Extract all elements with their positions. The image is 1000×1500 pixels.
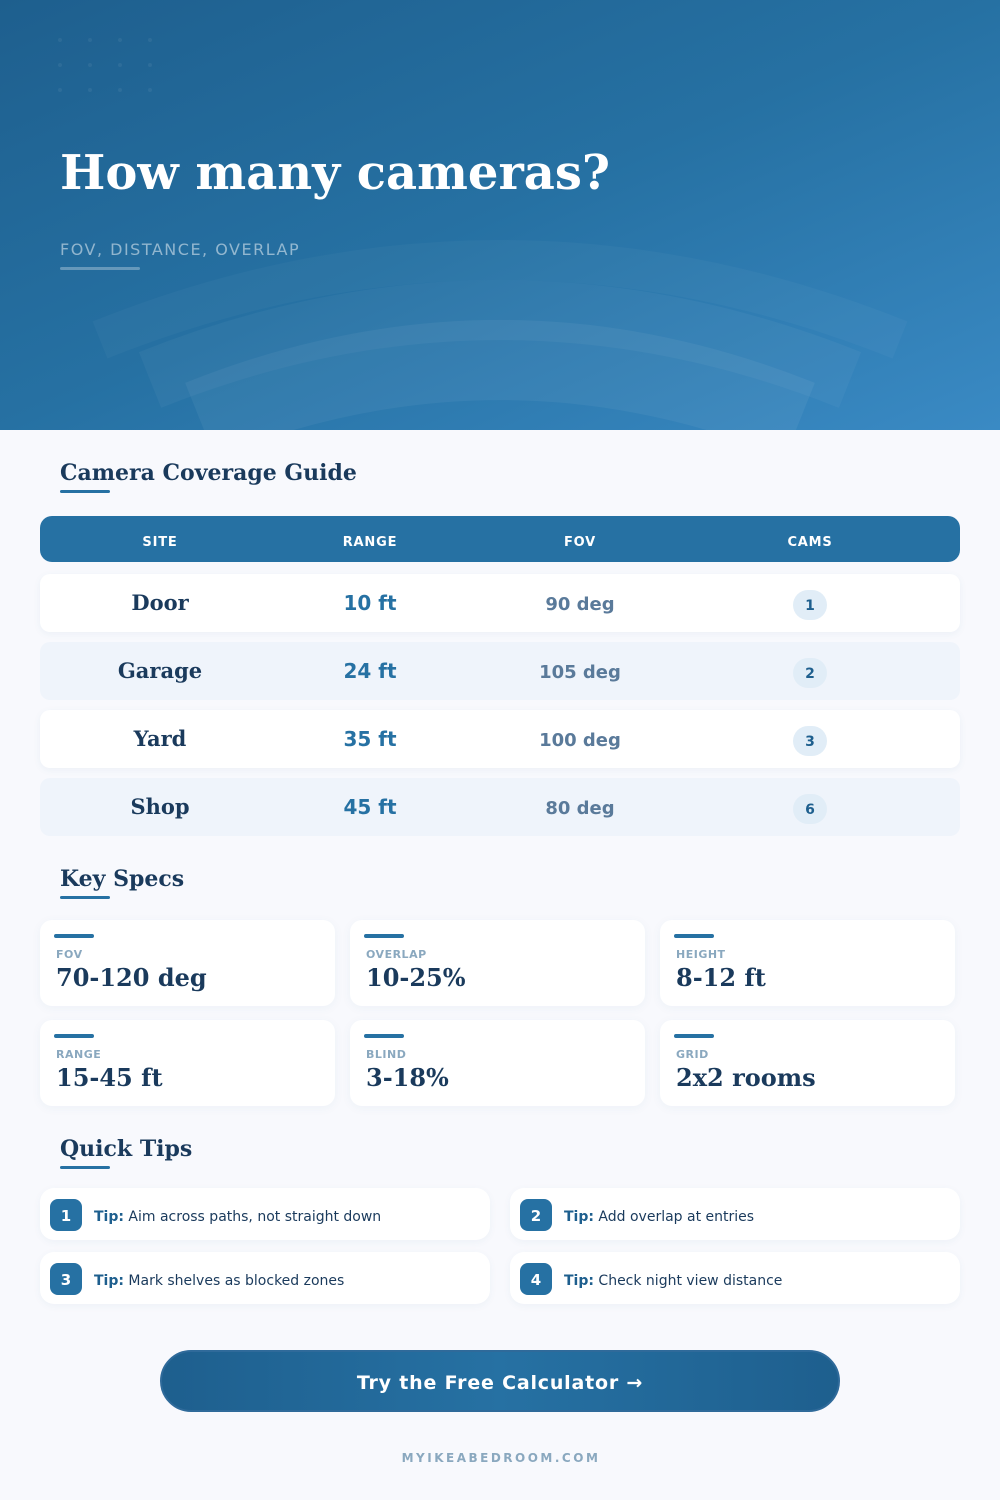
tip 3: Tip: Mark shelves as blocked zones bbox=[94, 1273, 344, 1289]
spec card: Overlap bbox=[350, 920, 645, 1006]
tip 4 bbox=[510, 1252, 960, 1304]
table row: Shop: 80 deg bbox=[545, 798, 615, 819]
footer: MYIKEABEDROOM.COM bbox=[402, 1451, 600, 1465]
spec card: Grid: GRID bbox=[676, 1048, 709, 1061]
spec card: Grid: 2x2 rooms bbox=[676, 1063, 816, 1092]
table row: Yard: 100 deg bbox=[539, 730, 621, 751]
table row: Garage: 24 ft bbox=[343, 659, 397, 683]
table row: Garage: 2 bbox=[805, 666, 815, 682]
spec card: Blind bbox=[350, 1020, 645, 1106]
spec card: Grid bbox=[660, 1020, 955, 1106]
spec card: Blind: BLIND bbox=[366, 1048, 406, 1061]
tip 4: 4 bbox=[531, 1271, 541, 1289]
tip 3 bbox=[40, 1252, 490, 1304]
tip 2 bbox=[510, 1188, 960, 1240]
tip 1: Tip: Aim across paths, not straight down bbox=[94, 1209, 381, 1225]
subtitle underline bbox=[60, 267, 140, 270]
table row: Yard bbox=[40, 710, 960, 768]
spec card: Blind: 3-18% bbox=[366, 1063, 449, 1092]
table row: Door: Door bbox=[131, 590, 189, 615]
table header: SITE bbox=[142, 535, 178, 550]
spec card: Height: HEIGHT bbox=[676, 948, 726, 961]
icon: dot pattern bbox=[58, 38, 152, 92]
title: How many cameras? bbox=[60, 145, 610, 201]
table row: Door: 10 ft bbox=[343, 591, 397, 615]
table row: Yard: Yard bbox=[134, 726, 186, 751]
table row: Door: 1 bbox=[805, 598, 815, 614]
panel: hero header bbox=[0, 0, 1000, 430]
tip 1: 1 bbox=[61, 1207, 71, 1225]
spec card: Height bbox=[660, 920, 955, 1006]
table row: Door: 90 deg bbox=[545, 594, 615, 615]
table row: Yard: 35 ft bbox=[343, 727, 397, 751]
table row: Yard: 3 bbox=[805, 734, 815, 750]
table header bbox=[40, 516, 960, 562]
spec card: Range: RANGE bbox=[56, 1048, 101, 1061]
call to action button bbox=[160, 1350, 840, 1412]
tip 3: 3 bbox=[61, 1271, 71, 1289]
table row: Shop bbox=[40, 778, 960, 836]
table row: Shop: 6 bbox=[805, 802, 815, 818]
spec card: Range: 15-45 ft bbox=[56, 1063, 163, 1092]
table row: Garage: 105 deg bbox=[539, 662, 621, 683]
table header: RANGE bbox=[343, 535, 397, 550]
spec card: FOV: FOV bbox=[56, 948, 83, 961]
heading: Camera Coverage Guide: Camera Coverage Guide bbox=[60, 460, 357, 486]
spec card: Range bbox=[40, 1020, 335, 1106]
spec card: Overlap: 10-25% bbox=[366, 963, 466, 992]
tip 1 bbox=[40, 1188, 490, 1240]
spec card: FOV bbox=[40, 920, 335, 1006]
tip 2: Tip: Add overlap at entries bbox=[564, 1209, 754, 1225]
table row: Shop: Shop bbox=[130, 794, 190, 819]
subtitle: FOV, DISTANCE, OVERLAP bbox=[60, 240, 300, 259]
call to action button: Try the Free Calculator → bbox=[357, 1372, 643, 1394]
table row: Garage: Garage bbox=[118, 658, 202, 683]
table header: CAMS bbox=[787, 535, 833, 550]
tip 4: Tip: Check night view distance bbox=[564, 1273, 782, 1289]
heading: Key Specs: Key Specs bbox=[60, 866, 184, 892]
spec card: Height: 8-12 ft bbox=[676, 963, 766, 992]
table row: Garage bbox=[40, 642, 960, 700]
spec card: Overlap: OVERLAP bbox=[366, 948, 427, 961]
icon: coverage arcs bbox=[185, 280, 815, 430]
table row: Shop: 45 ft bbox=[343, 795, 397, 819]
table row: Door bbox=[40, 574, 960, 632]
table header: FOV bbox=[564, 535, 596, 550]
heading: Quick Tips: Quick Tips bbox=[60, 1136, 192, 1162]
spec card: FOV: 70-120 deg bbox=[56, 963, 207, 992]
tip 2: 2 bbox=[531, 1207, 541, 1225]
